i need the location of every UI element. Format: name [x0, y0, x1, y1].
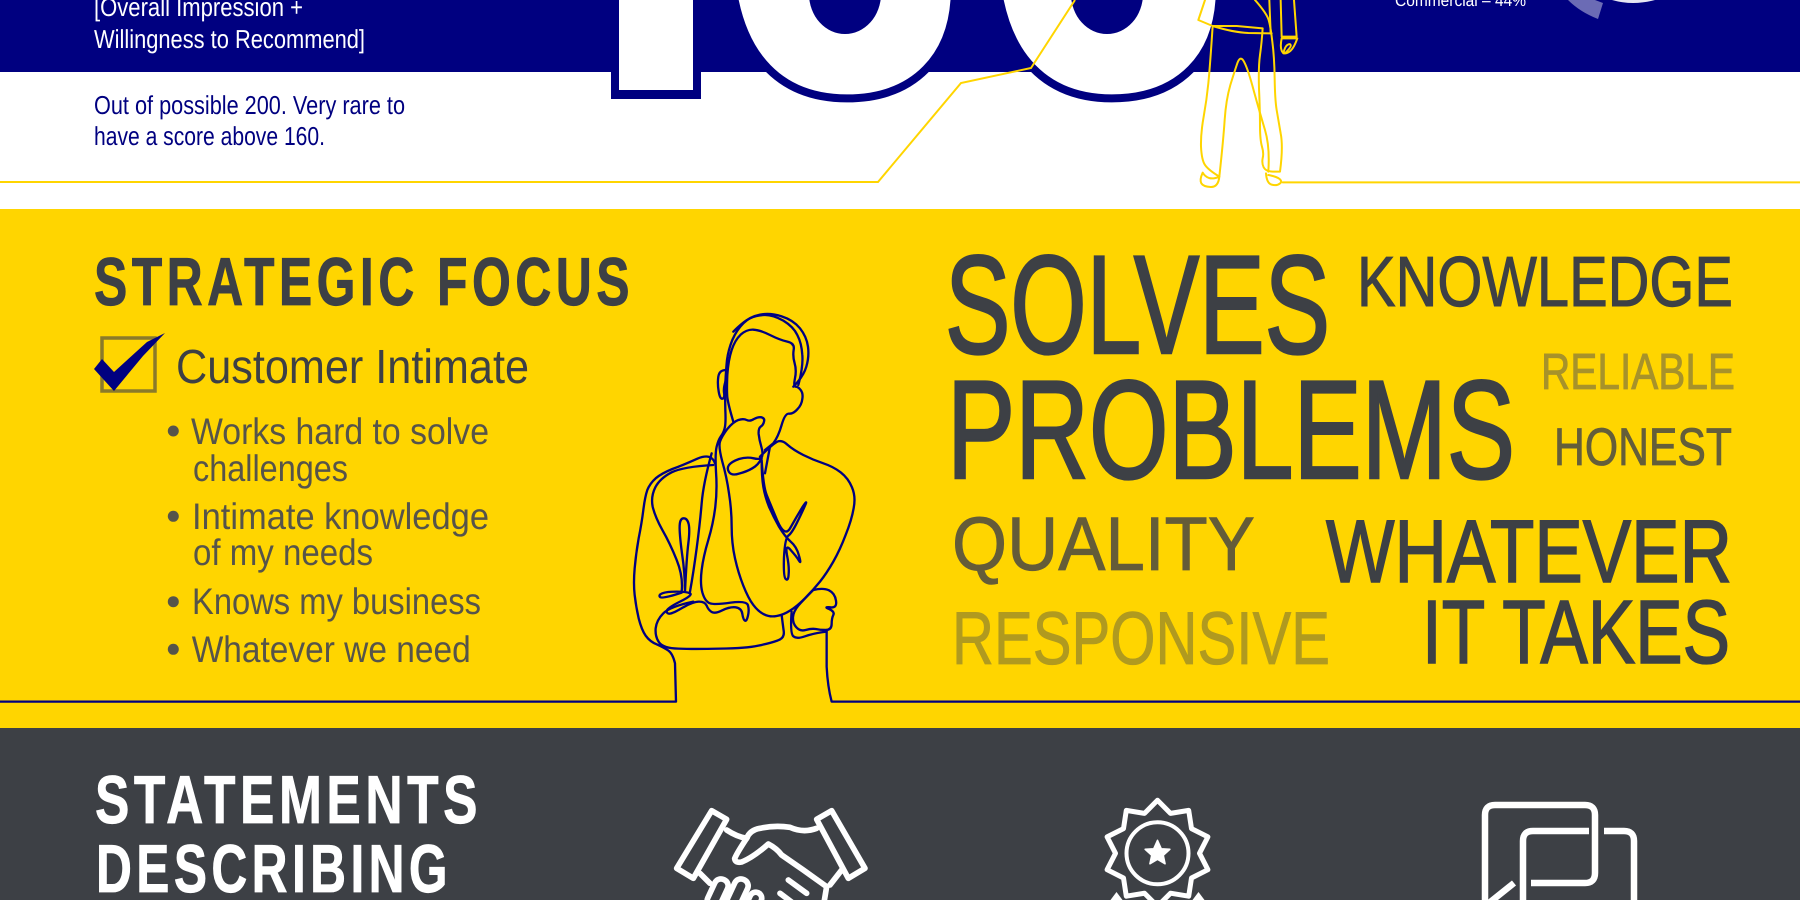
- icon: award badge: [1107, 800, 1208, 900]
- bullet list: Whatever we need: [192, 629, 471, 670]
- heading: statements describing: [95, 762, 482, 900]
- word cloud: [945, 226, 1735, 683]
- word cloud: SOLVES: [945, 226, 1330, 383]
- line figure: standing person: [1198, 0, 1800, 187]
- word cloud: HONEST: [1554, 418, 1732, 477]
- bullet list: of my needs: [193, 532, 373, 573]
- panel: score header: [0, 0, 1800, 187]
- bullet list: challenges: [193, 448, 348, 489]
- word cloud: QUALITY: [952, 502, 1255, 587]
- panel: strategic focus: [0, 209, 1800, 728]
- score note: have a score above 160.: [94, 121, 325, 151]
- bullet list: Knows my business: [192, 581, 481, 622]
- word cloud: RESPONSIVE: [952, 596, 1330, 680]
- word cloud: PROBLEMS: [947, 351, 1515, 508]
- score note: Out of possible 200. Very rare to: [94, 90, 405, 120]
- heading: strategic focus: STRATEGIC FOCUS: [94, 244, 634, 320]
- donut chart fragment: [1568, 0, 1655, 19]
- score label: [94, 0, 365, 54]
- panel: statements: [0, 728, 1800, 900]
- bullet list: Intimate knowledge: [192, 496, 489, 537]
- word cloud: RELIABLE: [1541, 343, 1735, 400]
- yellow connector line: [0, 0, 1075, 182]
- icon: chat bubbles: [1485, 805, 1634, 900]
- score label: Willingness to Recommend]: [94, 24, 365, 54]
- line figure: thinking person: [0, 314, 1800, 702]
- icon: handshake: [677, 811, 865, 900]
- customer intimate label: Customer Intimate: [176, 341, 529, 394]
- score note: [94, 90, 405, 151]
- big score number: [611, 0, 1216, 102]
- bullet list: Works hard to solve: [191, 411, 489, 452]
- heading: statements describing: STATEMENTS: [95, 762, 482, 838]
- bullet list: [168, 411, 489, 670]
- icon: checkbox: [94, 333, 165, 391]
